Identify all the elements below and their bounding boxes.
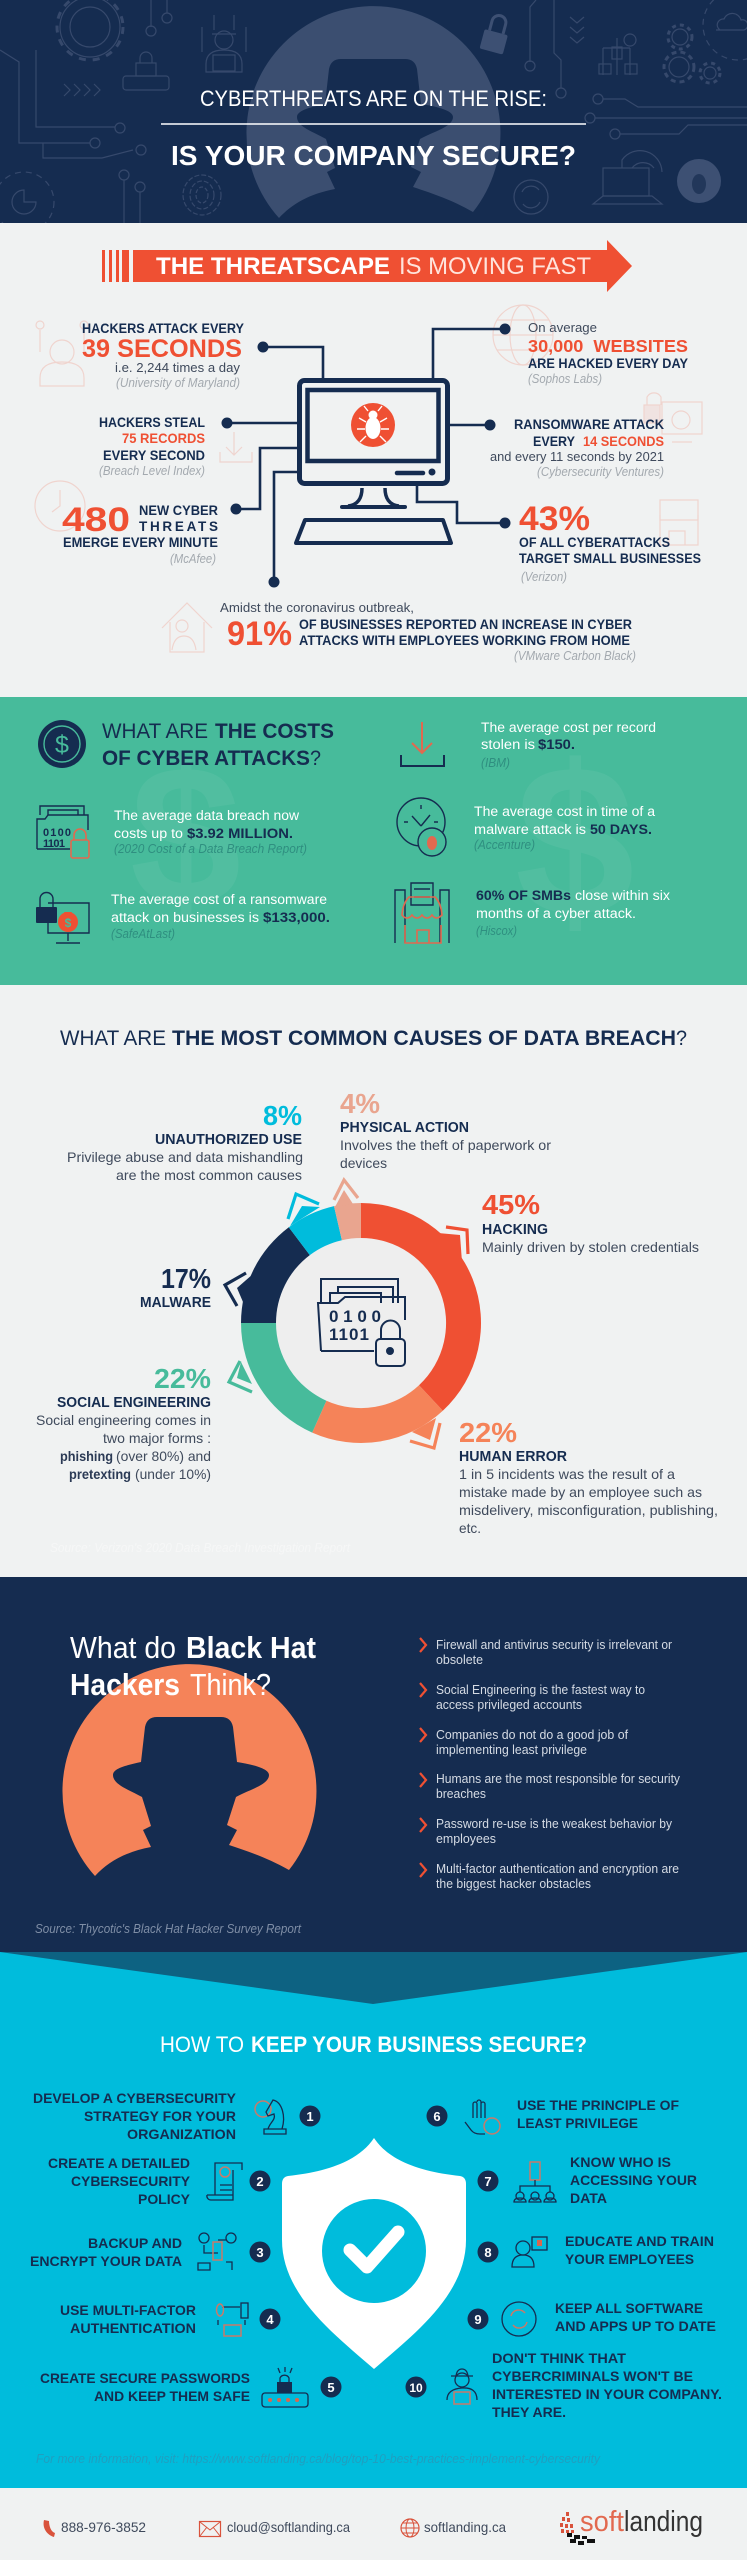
label: hacking: Mainly driven by stolen credentials bbox=[482, 1239, 699, 1255]
icon: dollar coin: $ bbox=[55, 731, 69, 759]
bullet list: obsolete bbox=[436, 1653, 483, 1667]
stat: 480 threats bbox=[62, 501, 218, 566]
contact: email: cloud@softlanding.ca bbox=[227, 2519, 350, 2535]
circuit background and icons bbox=[0, 0, 747, 232]
item: data breach: The average data breach now bbox=[114, 808, 299, 823]
step 5: CREATE SECURE PASSWORDS bbox=[40, 2370, 250, 2386]
step 3: BACKUP AND bbox=[88, 2235, 182, 2251]
stat: 39 seconds: 39 SECONDS bbox=[82, 335, 242, 363]
label: human error bbox=[459, 1417, 718, 1536]
heading bbox=[70, 1630, 316, 1702]
step 9: KEEP ALL SOFTWARE bbox=[555, 2300, 703, 2316]
icon: download bbox=[401, 722, 444, 766]
icon: data folder with padlock: 0100 bbox=[329, 1307, 381, 1326]
label: human error: 22% bbox=[459, 1417, 517, 1448]
arrow banner bbox=[102, 240, 632, 292]
label: unauthorized use: 8% bbox=[263, 1100, 302, 1131]
stat: 75 records: HACKERS STEAL bbox=[99, 415, 205, 430]
item: cost per record: The average cost per record bbox=[481, 720, 656, 735]
icon: padlock bbox=[480, 13, 512, 55]
panel: causes of data breach bbox=[0, 985, 747, 1577]
bullet list: Humans are the most responsible for security bbox=[436, 1772, 681, 1786]
stat: 480 threats: 480 bbox=[62, 501, 130, 539]
step 7: KNOW WHO IS bbox=[570, 2154, 671, 2170]
label: physical action: PHYSICAL ACTION bbox=[340, 1120, 469, 1136]
stat: 30,000 websites: ARE HACKED EVERY DAY bbox=[528, 356, 688, 371]
bullet list: employees bbox=[436, 1832, 496, 1846]
icon: data folder with padlock bbox=[318, 1279, 405, 1366]
icon: data folder with lock bbox=[37, 806, 89, 858]
icon: clock with bug bbox=[397, 798, 446, 856]
icon: store and office bbox=[395, 883, 449, 943]
label: social engineering: pretexting bbox=[69, 1466, 131, 1482]
stat: ransomware: (Cybersecurity Ventures) bbox=[537, 465, 664, 479]
connector lines bbox=[222, 324, 510, 588]
step 8: YOUR EMPLOYEES bbox=[565, 2251, 694, 2267]
step 4: 4 bbox=[266, 2312, 274, 2327]
step 7 bbox=[478, 2154, 697, 2206]
item: malware time: The average cost in time of a bbox=[474, 804, 656, 819]
panel: threatscape bbox=[0, 223, 747, 697]
bullet list: the biggest hacker obstacles bbox=[436, 1877, 591, 1891]
label: unauthorized use: UNAUTHORIZED USE bbox=[155, 1132, 302, 1148]
step 4: AUTHENTICATION bbox=[70, 2320, 196, 2336]
label: human error: misdelivery, misconfiguration, publishing, bbox=[459, 1502, 718, 1518]
bullet list: access privileged accounts bbox=[436, 1698, 582, 1712]
item: ransomware cost: $133,000. bbox=[263, 910, 330, 925]
label: social engineering: (under 10%) bbox=[135, 1466, 211, 1482]
contact: phone: 888-976-3852 bbox=[61, 2519, 146, 2535]
step 2: CYBERSECURITY bbox=[71, 2173, 191, 2189]
icon: data folder with padlock: 1101 bbox=[329, 1325, 369, 1344]
item: SMB closure: months of a cyber attack. bbox=[476, 906, 636, 921]
bullet list: Password re-use is the weakest behavior by bbox=[436, 1817, 673, 1831]
hacker silhouette bbox=[62, 1664, 316, 1876]
step 5: AND KEEP THEM SAFE bbox=[94, 2388, 250, 2404]
stat: 75 records: (Breach Level Index) bbox=[99, 464, 205, 478]
heading: WHAT ARE bbox=[60, 1027, 166, 1050]
step 3 bbox=[30, 2233, 270, 2270]
step 7: ACCESSING YOUR bbox=[570, 2172, 697, 2188]
logo: softlanding: landing bbox=[624, 2506, 703, 2538]
shield with check bbox=[282, 2138, 466, 2369]
bullet list: Firewall and antivirus security is irrelevant or bbox=[436, 1638, 672, 1652]
watermark dollar signs: $ bbox=[130, 725, 241, 948]
step 1: STRATEGY FOR YOUR bbox=[84, 2108, 236, 2124]
item: malware time: malware attack is bbox=[474, 822, 586, 837]
heading: WHAT ARE bbox=[102, 720, 208, 743]
label: hacking: 45% bbox=[482, 1189, 540, 1220]
bullet list: Social Engineering is the fastest way to bbox=[436, 1683, 645, 1697]
label: malware bbox=[140, 1263, 211, 1311]
label: social engineering: (over 80%) and bbox=[116, 1448, 211, 1464]
stat: 39 seconds: (University of Maryland) bbox=[116, 376, 240, 390]
stat: 43% bbox=[519, 500, 701, 584]
panel: header bbox=[0, 0, 747, 232]
step 7: DATA bbox=[570, 2190, 607, 2206]
logo: softlanding bbox=[560, 2506, 703, 2545]
stat: 91%: ATTACKS WITH EMPLOYEES WORKING FROM HOME bbox=[299, 633, 630, 648]
watermark dollar signs bbox=[130, 720, 635, 961]
stat: 39 seconds: HACKERS ATTACK EVERY bbox=[82, 321, 244, 336]
computer illustration bbox=[296, 380, 451, 543]
arrow banner: IS MOVING FAST bbox=[399, 253, 591, 280]
item: cost per record bbox=[481, 720, 656, 770]
panel: black hat hackers bbox=[0, 1577, 747, 1952]
heading: HOW TO bbox=[160, 2032, 244, 2057]
icon: ransomware monitor: $ bbox=[65, 916, 72, 930]
bullet list: Companies do not do a good job of bbox=[436, 1728, 629, 1742]
step 10: THEY ARE. bbox=[492, 2404, 566, 2420]
heading: Think? bbox=[190, 1667, 271, 1702]
contact: website bbox=[401, 2519, 506, 2537]
stat: 43%: OF ALL CYBERATTACKS bbox=[519, 535, 670, 550]
item: SMB closure: 60% OF SMBs bbox=[476, 888, 571, 903]
heading: KEEP YOUR BUSINESS SECURE? bbox=[251, 2032, 587, 2057]
faint background icons bbox=[35, 305, 702, 652]
label: social engineering: 22% bbox=[154, 1363, 211, 1394]
stat: 91% bbox=[220, 600, 636, 663]
panel: costs of cyber attacks bbox=[0, 697, 747, 985]
step 1: 1 bbox=[306, 2109, 314, 2124]
label: unauthorized use bbox=[67, 1100, 303, 1183]
item: malware time bbox=[474, 804, 656, 852]
heading: ? bbox=[676, 1027, 687, 1050]
step 1 bbox=[33, 2090, 320, 2142]
icon: bug badge bbox=[677, 159, 721, 203]
item: ransomware cost: attack on businesses is bbox=[111, 910, 259, 925]
stat: 30,000 websites: (Sophos Labs) bbox=[528, 372, 602, 386]
heading: THE MOST COMMON CAUSES OF DATA BREACH bbox=[172, 1027, 676, 1050]
step 9: 9 bbox=[474, 2312, 482, 2327]
step 4: USE MULTI-FACTOR bbox=[60, 2302, 196, 2318]
donut chart bbox=[225, 1180, 481, 1448]
stat: 75 records: 75 RECORDS bbox=[122, 430, 205, 446]
stat: 75 records bbox=[99, 415, 205, 478]
step 6: 6 bbox=[433, 2109, 441, 2124]
icon: ransomware monitor bbox=[36, 892, 89, 943]
item: cost per record: stolen is bbox=[481, 737, 535, 752]
panel: footer bbox=[0, 2488, 747, 2560]
step 10 bbox=[406, 2350, 722, 2420]
source note: Source: Thycotic's Black Hat Hacker Survey Report bbox=[35, 1921, 302, 1936]
icon: data folder with lock: 0100 bbox=[43, 827, 71, 839]
step 8: 8 bbox=[484, 2245, 492, 2260]
step 10: 10 bbox=[409, 2381, 423, 2395]
step 10: INTERESTED IN YOUR COMPANY. bbox=[492, 2386, 722, 2402]
item: data breach bbox=[114, 808, 307, 856]
label: physical action bbox=[340, 1088, 551, 1171]
stat: 43%: (Verizon) bbox=[521, 570, 567, 584]
stat: 480 threats: EMERGE EVERY MINUTE bbox=[63, 535, 218, 550]
step 1: DEVELOP A CYBERSECURITY bbox=[33, 2090, 237, 2106]
stat: ransomware: and every 11 seconds by 2021 bbox=[490, 449, 664, 464]
bullet list: breaches bbox=[436, 1787, 486, 1801]
icon: data folder with lock: 1101 bbox=[43, 838, 65, 850]
step 1: ORGANIZATION bbox=[127, 2126, 236, 2142]
step 6 bbox=[426, 2097, 679, 2134]
item: ransomware cost: (SafeAtLast) bbox=[111, 927, 175, 941]
arrow banner: THE THREATSCAPE bbox=[156, 253, 390, 280]
item: ransomware cost: The average cost of a ransomware bbox=[111, 892, 327, 907]
title line 2: IS YOUR COMPANY SECURE? bbox=[171, 140, 576, 171]
stat: 480 threats: (McAfee) bbox=[170, 552, 216, 566]
step 10: DON'T THINK THAT bbox=[492, 2350, 626, 2366]
label: human error: mistake made by an employee such as bbox=[459, 1484, 702, 1500]
label: physical action: Involves the theft of paperwork or bbox=[340, 1137, 551, 1153]
heading: OF CYBER ATTACKS bbox=[102, 747, 310, 770]
stat: 91%: 91% bbox=[227, 615, 292, 653]
step 9 bbox=[468, 2300, 716, 2336]
step 2: POLICY bbox=[138, 2191, 191, 2207]
heading: ? bbox=[310, 747, 321, 770]
step 6: LEAST PRIVILEGE bbox=[517, 2115, 638, 2131]
icon: dollar coin bbox=[38, 720, 86, 768]
step 5 bbox=[40, 2367, 342, 2407]
step 10: CYBERCRIMINALS WON'T BE bbox=[492, 2368, 693, 2384]
item: SMB closure: close within six bbox=[575, 888, 670, 903]
item: SMB closure bbox=[476, 888, 670, 938]
bullet chevrons bbox=[420, 1638, 426, 1877]
step 4 bbox=[60, 2302, 280, 2336]
label: unauthorized use: are the most common causes bbox=[116, 1167, 302, 1183]
stat: ransomware bbox=[490, 417, 664, 479]
step 3: 3 bbox=[256, 2245, 264, 2260]
item: malware time: (Accenture) bbox=[474, 838, 535, 852]
label: human error: HUMAN ERROR bbox=[459, 1449, 568, 1465]
step 2: CREATE A DETAILED bbox=[48, 2155, 190, 2171]
bullet list: implementing least privilege bbox=[436, 1743, 587, 1757]
heading: What do bbox=[70, 1630, 176, 1665]
item: malware time: 50 DAYS. bbox=[590, 822, 652, 837]
step 7: 7 bbox=[484, 2174, 492, 2189]
step 9: AND APPS UP TO DATE bbox=[555, 2318, 716, 2334]
stat: ransomware: 14 SECONDS bbox=[583, 433, 664, 449]
stat: 30,000 websites: On average bbox=[528, 320, 597, 335]
stat: 480 threats: THREATS bbox=[139, 519, 218, 534]
bullet list bbox=[436, 1638, 681, 1891]
stat: 91%: Amidst the coronavirus outbreak, bbox=[220, 600, 414, 615]
label: human error: etc. bbox=[459, 1520, 481, 1536]
step 2 bbox=[48, 2155, 270, 2207]
step 5: 5 bbox=[327, 2380, 335, 2395]
source note: Source: Verizon's 2020 Data Breach Investigation Report bbox=[50, 1541, 350, 1555]
stat: 39 seconds: i.e. 2,244 times a day bbox=[115, 360, 240, 375]
item: data breach: costs up to bbox=[114, 826, 183, 841]
stat: 39 seconds bbox=[82, 321, 244, 390]
label: social engineering: SOCIAL ENGINEERING bbox=[57, 1395, 211, 1411]
stat: 43%: 43% bbox=[519, 500, 590, 538]
step 6: USE THE PRINCIPLE OF bbox=[517, 2097, 679, 2113]
label: social engineering: two major forms : bbox=[103, 1430, 211, 1446]
label: unauthorized use: Privilege abuse and data mishandling bbox=[67, 1149, 303, 1165]
label: malware: 17% bbox=[161, 1263, 211, 1294]
title line 1: CYBERTHREATS ARE ON THE RISE: bbox=[200, 86, 547, 111]
step 8: EDUCATE AND TRAIN bbox=[565, 2233, 714, 2249]
stat: 91%: (VMware Carbon Black) bbox=[514, 649, 636, 663]
heading: Hackers bbox=[70, 1667, 180, 1702]
label: social engineering bbox=[36, 1363, 211, 1482]
label: human error: 1 in 5 incidents was the result of a bbox=[459, 1466, 675, 1482]
stat: 480 threats: NEW CYBER bbox=[139, 503, 218, 518]
stat: ransomware: RANSOMWARE ATTACK bbox=[514, 417, 664, 432]
label: physical action: 4% bbox=[340, 1088, 380, 1119]
stat: 30,000 websites: 30,000 WEBSITES bbox=[528, 336, 688, 356]
item: cost per record: $150. bbox=[538, 737, 575, 752]
stat: 43%: TARGET SMALL BUSINESSES bbox=[519, 551, 701, 566]
panel: keep your business secure bbox=[0, 1952, 747, 2488]
label: physical action: devices bbox=[340, 1155, 387, 1171]
heading: Black Hat bbox=[186, 1630, 316, 1665]
label: social engineering: Social engineering comes in bbox=[36, 1412, 211, 1428]
step 2: 2 bbox=[256, 2174, 264, 2189]
icon: bug badge on screen bbox=[351, 403, 395, 447]
item: data breach: (2020 Cost of a Data Breach Report) bbox=[114, 842, 307, 856]
more information link text: For more information, visit: https://www.softlanding.ca/blog/top-10-best-practices-implement-cybersecurity bbox=[36, 2451, 601, 2466]
step 8 bbox=[478, 2233, 714, 2267]
item: data breach: $3.92 MILLION. bbox=[187, 826, 293, 841]
hacker silhouette bbox=[246, 6, 500, 218]
contact: website: softlanding.ca bbox=[424, 2519, 506, 2535]
label: hacking bbox=[482, 1189, 699, 1255]
logo: softlanding: soft bbox=[580, 2506, 624, 2538]
label: hacking: HACKING bbox=[482, 1222, 548, 1238]
item: cost per record: (IBM) bbox=[481, 756, 510, 770]
stat: 91%: OF BUSINESSES REPORTED AN INCREASE IN CYBER bbox=[299, 617, 632, 632]
label: malware: MALWARE bbox=[140, 1295, 211, 1311]
stat: 30,000 websites bbox=[528, 320, 688, 386]
stat: 75 records: EVERY SECOND bbox=[103, 448, 205, 463]
step 3: ENCRYPT YOUR DATA bbox=[30, 2253, 182, 2269]
heading: THE COSTS bbox=[215, 720, 334, 743]
item: ransomware cost bbox=[111, 892, 330, 941]
bullet list: Multi-factor authentication and encryption are bbox=[436, 1862, 679, 1876]
heading bbox=[102, 720, 334, 770]
item: SMB closure: (Hiscox) bbox=[476, 924, 517, 938]
stat: ransomware: EVERY bbox=[533, 434, 575, 449]
watermark dollar signs: $ bbox=[515, 720, 635, 961]
label: social engineering: phishing bbox=[60, 1448, 113, 1464]
